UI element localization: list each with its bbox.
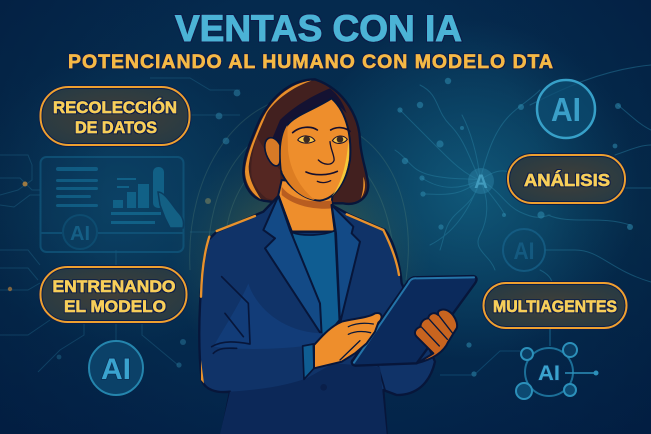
neural network decoration [395,65,651,284]
subtitle: POTENCIANDO AL HUMANO CON MODELO DTA [68,51,553,73]
pill: multiagentes: MULTIAGENTES [493,298,617,316]
icon: multi-agent AI network: AI [538,362,560,385]
pill: entrenando el modelo: ENTRENANDO [52,277,176,296]
right hand behind tablet [415,310,457,363]
neuron core with letter A [468,168,494,194]
hair dark shading [272,88,347,148]
icon: AI circle top right: AI [551,91,581,128]
person: woman with tablet [199,79,477,434]
pill: recolección de datos [40,87,190,145]
concentric rings behind person [190,95,408,280]
pill: análisis [508,155,625,203]
shirt [292,231,339,340]
AI badge [41,232,183,234]
right lapel [332,205,360,323]
panel: dashboard with AI and chart: AI [70,223,90,245]
icon: multi-agent AI network [440,329,598,399]
circuit nodes left [8,90,240,368]
jacket body [199,196,435,434]
pill: análisis: ANÁLISIS [524,169,610,190]
neck and chest [278,180,335,235]
pointing hand [158,192,183,228]
text lines [56,167,98,207]
left hand on tablet [314,313,382,368]
title: VENTAS CON IA [175,8,462,49]
sleeve cuff [303,344,314,379]
neural nodes [397,78,633,377]
pill: multiagentes [484,283,626,328]
icon: AI circle bottom left [89,341,143,395]
mini bar chart [111,167,164,224]
lower body shade [220,363,387,434]
pill: recolección de datos: DE DATOS [75,118,157,137]
pill: entrenando el modelo: EL MODELO [64,297,166,316]
face [280,98,350,201]
circuit lines left [0,78,240,372]
icon: faint AI circle [503,229,545,271]
left lapel [263,196,322,335]
ear [265,138,280,166]
mouth [306,171,337,175]
hair highlight [245,81,312,199]
icon: AI circle top right [537,80,595,138]
shoulder highlights [201,214,399,297]
hair back [243,79,368,204]
icon: faint AI circle: AI [514,238,534,265]
eyes [298,136,315,143]
tablet [352,276,477,366]
panel: dashboard with AI and chart [40,157,184,252]
jacket sleeve shading [213,283,323,349]
pill: entrenando el modelo [40,267,186,322]
eyebrows [293,127,350,133]
neuron core with letter A: A [474,172,488,193]
icon: AI circle bottom left: AI [101,353,131,386]
pill: recolección de datos: RECOLECCIÓN [53,98,177,117]
nose [318,142,334,164]
